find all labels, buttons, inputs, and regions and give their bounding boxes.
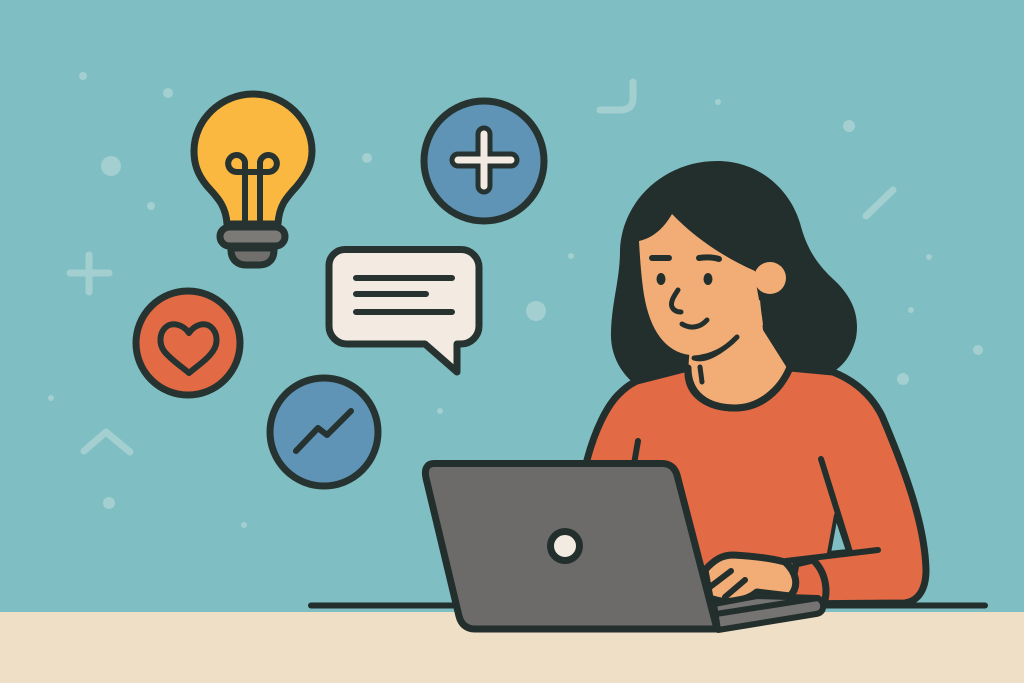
- left arm crease: [634, 441, 638, 464]
- jaw line: [694, 337, 737, 359]
- table edge line: [311, 602, 985, 608]
- keyboard edge: [716, 598, 818, 614]
- fingers: [710, 571, 745, 597]
- ear: [754, 262, 786, 294]
- hand: [705, 555, 796, 601]
- laptop lid: [425, 464, 717, 629]
- nose: [671, 290, 681, 312]
- laptop base: [714, 596, 823, 630]
- icon: trend chart circle: [270, 378, 378, 486]
- person: [587, 161, 926, 606]
- right arm crease: [821, 459, 850, 552]
- neck crease: [700, 367, 702, 382]
- sleeve line: [786, 550, 878, 561]
- mouth: [682, 320, 707, 327]
- icon: speech bubble: [329, 250, 479, 372]
- laptop: [425, 464, 823, 630]
- icon: plus circle: [424, 101, 544, 221]
- eyes: [656, 273, 712, 285]
- laptop logo: [550, 532, 580, 560]
- collar: [688, 367, 790, 408]
- icon: light bulb: [194, 94, 312, 265]
- face: [639, 214, 763, 355]
- sweater: [587, 368, 926, 605]
- cuff: [788, 560, 826, 606]
- eyebrows: [652, 257, 719, 259]
- neck: [688, 300, 787, 408]
- table: [0, 612, 1024, 683]
- decorative background marks: [48, 72, 983, 528]
- icon: heart circle: [136, 291, 240, 395]
- arm gap: [829, 515, 848, 553]
- hair: [611, 161, 857, 388]
